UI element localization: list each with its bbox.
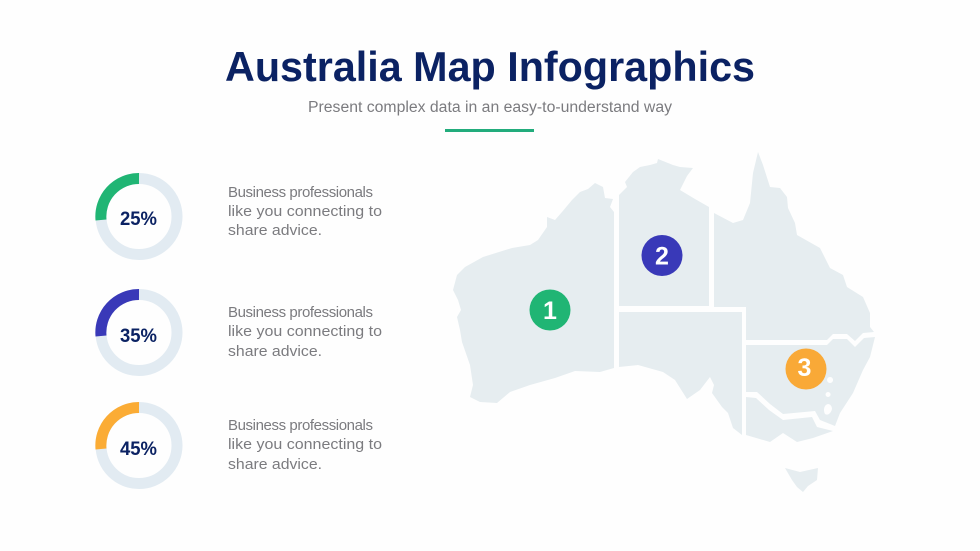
- text block 2: [228, 304, 382, 360]
- donut item 3: 45%: [101, 407, 177, 484]
- text block 2: like you connecting to: [228, 323, 382, 340]
- region: Northern Territory: [619, 159, 709, 306]
- region: South Australia: [619, 312, 742, 435]
- title: Australia Map Infographics: [225, 43, 755, 90]
- marker 1: [530, 290, 570, 330]
- donut item 2: 35%: 35%: [120, 326, 157, 347]
- marker 3: 3: [798, 354, 811, 382]
- accent underline: [445, 129, 534, 132]
- text block 3: Business professionals: [228, 417, 373, 434]
- Australia map: [453, 152, 875, 492]
- marker 2: [642, 235, 682, 276]
- marker 3: [786, 348, 826, 390]
- subtitle: Present complex data in an easy-to-understand way: [308, 99, 672, 116]
- text block 1: like you connecting to: [228, 203, 382, 220]
- text block 3: share advice.: [228, 456, 322, 473]
- marker 1: 1: [543, 297, 557, 325]
- text block 2: share advice.: [228, 343, 322, 360]
- text block 1: Business professionals: [228, 184, 373, 201]
- region: Queensland: [714, 152, 874, 341]
- donut item 1: 25%: 25%: [120, 209, 157, 230]
- text block 2: Business professionals: [228, 304, 373, 321]
- text block 3: like you connecting to: [228, 436, 382, 453]
- region: Tasmania: [785, 468, 818, 492]
- text block 1: share advice.: [228, 222, 322, 239]
- region: Western Australia: [453, 183, 614, 403]
- donut item 1: 25%: [101, 178, 177, 254]
- donut item 2: 35%: [101, 294, 177, 370]
- donut item 3: 45%: 45%: [120, 439, 157, 460]
- region: Victoria: [746, 397, 833, 442]
- text block 3: [228, 417, 382, 473]
- region: New South Wales: [746, 337, 875, 426]
- text block 1: [228, 184, 382, 239]
- marker 2: 2: [655, 242, 669, 270]
